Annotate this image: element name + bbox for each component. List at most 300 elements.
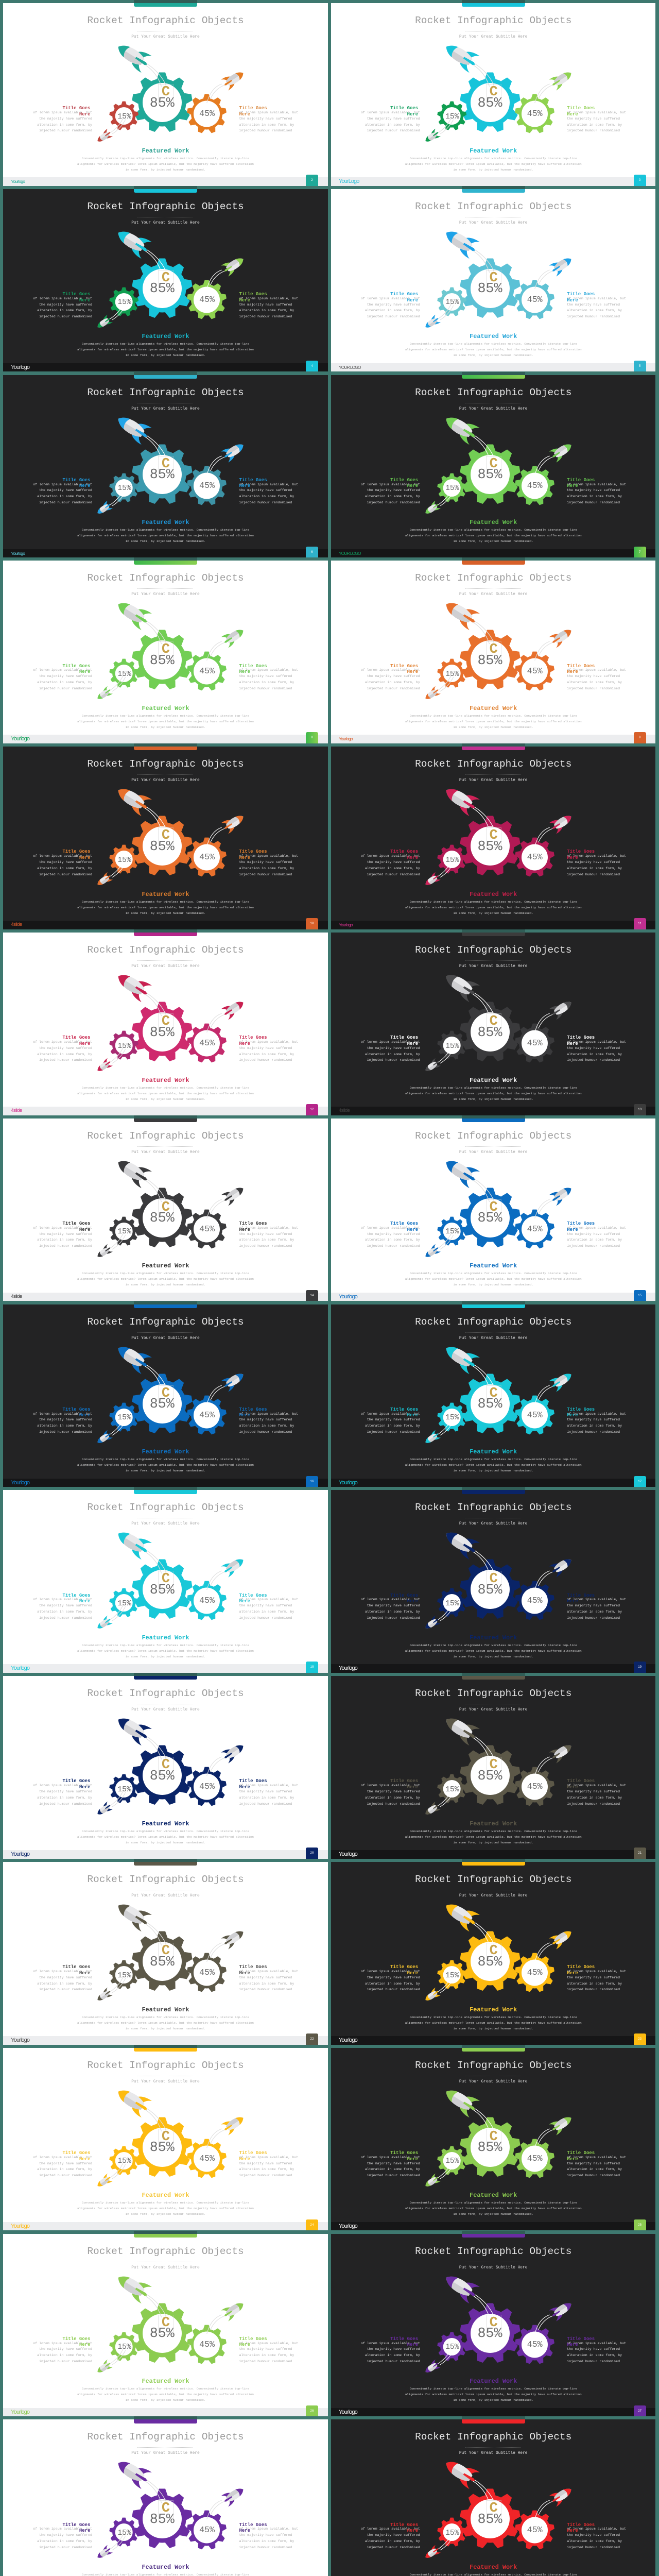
gears and rockets xyxy=(3,1304,328,1487)
left text: the majority have suffered xyxy=(367,488,420,492)
right title xyxy=(567,1035,595,1047)
value 45: 45% xyxy=(527,1596,543,1606)
left title xyxy=(55,1221,90,1233)
top tab xyxy=(462,189,525,193)
left text xyxy=(29,853,92,877)
left text: alteration in some form, by xyxy=(37,495,92,498)
right text: the majority have suffered xyxy=(567,674,620,678)
right title: Title Goes xyxy=(239,292,267,297)
left title: Here xyxy=(79,298,90,303)
small gear xyxy=(437,287,466,316)
title: Rocket Infographic Objects xyxy=(87,1874,244,1885)
right text: of lorem ipsum available, but xyxy=(567,111,626,114)
page number xyxy=(306,918,318,929)
subtitle: Put Your Great Subtitle Here xyxy=(131,778,200,783)
featured text: in some form, by injected humour randomised. xyxy=(453,725,533,729)
value 15: 15% xyxy=(117,484,131,493)
page number: 16 xyxy=(310,1480,314,1483)
right text xyxy=(567,1597,626,1621)
left text: of lorem ipsum available, but xyxy=(361,1598,420,1601)
left text: injected humour randomised xyxy=(367,315,420,318)
left text xyxy=(357,1597,420,1621)
left title: Title Goes xyxy=(62,1035,90,1040)
right text: of lorem ipsum available, but xyxy=(239,854,298,858)
featured text: alignments for wireless metrics? lorem ipsum available, but the majority have suffered alteration xyxy=(77,348,254,351)
left text: alteration in some form, by xyxy=(37,1238,92,1242)
left text xyxy=(29,1783,92,1807)
value 45: 45% xyxy=(199,1596,215,1606)
featured text xyxy=(405,342,582,357)
value 45: 45% xyxy=(199,667,215,676)
right text xyxy=(239,2526,298,2551)
page number: 23 xyxy=(638,2037,641,2041)
right title xyxy=(239,1035,267,1047)
left text: injected humour randomised xyxy=(367,1244,420,1248)
right text: the majority have suffered xyxy=(567,1418,620,1421)
right rocket xyxy=(535,811,575,846)
large rocket xyxy=(113,224,166,273)
slide 22 olive xyxy=(3,1862,328,2044)
left text: injected humour randomised xyxy=(39,2546,92,2549)
watermark xyxy=(486,1199,501,1219)
right text: injected humour randomised xyxy=(239,687,292,690)
right text: the majority have suffered xyxy=(239,2347,292,2351)
right text: of lorem ipsum available, but xyxy=(567,297,626,300)
gears and rockets xyxy=(425,45,571,142)
footer xyxy=(3,2036,328,2044)
small rocket xyxy=(95,861,126,888)
big gear xyxy=(132,73,193,133)
logo: 4slide xyxy=(11,1108,22,1113)
value 45: 45% xyxy=(199,2154,215,2164)
right text xyxy=(567,1969,626,1993)
page number xyxy=(634,918,646,929)
big gear xyxy=(460,1374,521,1434)
left text: the majority have suffered xyxy=(39,1046,92,1050)
logo: Yourlogo xyxy=(339,1665,357,1671)
left text: injected humour randomised xyxy=(367,2174,420,2177)
left text: alteration in some form, by xyxy=(365,1796,420,1800)
featured text xyxy=(3,2200,328,2217)
value 85: 85% xyxy=(477,2140,502,2156)
left text xyxy=(29,1969,92,1993)
watermark xyxy=(158,1571,174,1591)
top tab xyxy=(462,3,525,7)
page number xyxy=(306,2033,318,2044)
right text xyxy=(239,1783,298,1807)
right title xyxy=(567,1964,595,1976)
right title: Here xyxy=(567,1041,578,1046)
left title: Title Goes xyxy=(390,478,418,483)
left text: alteration in some form, by xyxy=(365,1424,420,1428)
page number xyxy=(306,361,318,371)
left text: the majority have suffered xyxy=(367,303,420,307)
footer xyxy=(331,2408,655,2416)
right gear xyxy=(515,280,554,319)
small rocket xyxy=(423,1233,454,1260)
featured text: Conveniently iterate top-line alignments for wireless metrics. Conveniently iterate top-line xyxy=(82,2387,249,2391)
watermark: C xyxy=(162,1943,170,1959)
value 85: 85% xyxy=(477,2326,502,2342)
right text: of lorem ipsum available, but xyxy=(239,668,298,672)
title: Rocket Infographic Objects xyxy=(415,201,571,212)
featured text: alignments for wireless metrics? lorem ipsum available, but the majority have suffered alteration xyxy=(77,720,254,723)
featured text: alignments for wireless metrics? lorem ipsum available, but the majority have suffered alteration xyxy=(77,1277,254,1281)
featured text xyxy=(3,1456,328,1473)
right text xyxy=(239,1225,298,1249)
featured text: Conveniently iterate top-line alignments for wireless metrics. Conveniently iterate top-line xyxy=(410,2201,577,2205)
footer xyxy=(3,1107,328,1115)
subtitle: Put Your Great Subtitle Here xyxy=(459,964,527,969)
featured heading: Featured Work xyxy=(470,2378,517,2385)
page number: 26 xyxy=(310,2409,314,2413)
logo: Yourlogo xyxy=(11,2223,29,2229)
right rocket xyxy=(207,1369,247,1404)
featured text: in some form, by injected humour randomised. xyxy=(126,2398,205,2402)
right text: injected humour randomised xyxy=(239,1430,292,1434)
featured text xyxy=(77,342,254,357)
featured text: Conveniently iterate top-line alignments for wireless metrics. Conveniently iterate top-line xyxy=(82,714,249,718)
logo: Yourlogo xyxy=(11,1480,29,1486)
value 45: 45% xyxy=(527,853,543,862)
big gear xyxy=(132,1560,193,1620)
left title: Here xyxy=(407,855,418,860)
subtitle: Put Your Great Subtitle Here xyxy=(131,2265,200,2270)
small gear xyxy=(437,1774,466,1804)
right text: alteration in some form, by xyxy=(567,495,622,498)
left title xyxy=(62,292,91,303)
left text: injected humour randomised xyxy=(367,1988,420,1991)
small gear xyxy=(437,101,466,130)
top tab xyxy=(134,933,197,936)
left text: of lorem ipsum available, but xyxy=(361,1040,420,1044)
big gear xyxy=(132,630,193,690)
value 85: 85% xyxy=(477,467,502,483)
featured heading: Featured Work xyxy=(142,2564,189,2571)
right text: alteration in some form, by xyxy=(239,1982,294,1986)
right title: Title Goes xyxy=(567,1778,595,1784)
page number: 17 xyxy=(638,1480,641,1483)
large rocket xyxy=(441,1897,494,1945)
value 15: 15% xyxy=(117,1971,131,1979)
left text: alteration in some form, by xyxy=(37,309,92,312)
left title xyxy=(55,1035,90,1047)
left text: of lorem ipsum available, but xyxy=(33,1412,92,1416)
value 85: 85% xyxy=(150,2512,175,2528)
big gear xyxy=(460,816,521,876)
right gear xyxy=(515,1024,554,1063)
right text: alteration in some form, by xyxy=(239,1610,294,1614)
right title: Here xyxy=(567,1599,578,1604)
small rocket xyxy=(95,1790,126,1818)
right text: of lorem ipsum available, but xyxy=(239,1970,298,1973)
value 45: 45% xyxy=(527,667,543,676)
right text: injected humour randomised xyxy=(239,1616,292,1620)
left text xyxy=(361,297,420,318)
right text: the majority have suffered xyxy=(567,2533,620,2537)
right title: Here xyxy=(567,1971,578,1976)
right title: Here xyxy=(239,1413,250,1418)
watermark: C xyxy=(490,2129,498,2145)
logo: Yourlogo xyxy=(339,2409,357,2415)
featured text: alignments for wireless metrics? lorem ipsum available, but the majority have suffered alteration xyxy=(77,1091,254,1095)
small rocket xyxy=(95,2348,126,2376)
right title: Title Goes xyxy=(239,1407,267,1412)
featured text: alignments for wireless metrics? lorem ipsum available, but the majority have suffered alteration xyxy=(405,1463,582,1467)
right rocket xyxy=(207,1554,247,1590)
big gear xyxy=(132,1374,193,1434)
gears and rockets xyxy=(331,1490,655,1673)
right text xyxy=(567,2526,626,2551)
page number: 27 xyxy=(638,2409,641,2413)
right text: the majority have suffered xyxy=(239,1232,292,1236)
value 15: 15% xyxy=(445,298,459,307)
left text: of lorem ipsum available, but xyxy=(361,1784,420,1787)
small rocket xyxy=(423,2162,454,2190)
value 45: 45% xyxy=(199,1411,215,1420)
value 45: 45% xyxy=(199,2526,215,2535)
top tab xyxy=(462,747,525,750)
right title: Title Goes xyxy=(239,478,267,483)
watermark xyxy=(486,2129,501,2149)
right rocket xyxy=(207,1740,247,1776)
featured heading: Featured Work xyxy=(470,1077,517,1084)
top tab xyxy=(462,2048,525,2052)
left text: of lorem ipsum available, but xyxy=(33,1226,92,1230)
left text: injected humour randomised xyxy=(367,1058,420,1062)
gears and rockets xyxy=(331,1304,655,1487)
featured text: Conveniently iterate top-line alignments for wireless metrics. Conveniently iterate top-line xyxy=(82,342,249,346)
right text: the majority have suffered xyxy=(567,488,620,492)
subtitle: Put Your Great Subtitle Here xyxy=(131,1893,200,1898)
featured text: alignments for wireless metrics? lorem ipsum available, but the majority have suffered alteration xyxy=(77,1463,254,1467)
small rocket xyxy=(423,1419,454,1446)
left text: alteration in some form, by xyxy=(365,123,420,127)
slide 2 teal xyxy=(3,3,328,185)
watermark: C xyxy=(490,2315,498,2331)
right text: alteration in some form, by xyxy=(239,867,294,870)
title: Rocket Infographic Objects xyxy=(415,1130,571,1142)
right title xyxy=(239,106,267,117)
right text: the majority have suffered xyxy=(239,674,292,678)
watermark: C xyxy=(490,1571,498,1587)
large rocket xyxy=(441,1711,494,1759)
left text: the majority have suffered xyxy=(367,674,420,678)
gears and rockets xyxy=(331,1676,655,1859)
right title: Title Goes xyxy=(239,664,267,669)
big gear xyxy=(132,1745,193,1806)
subtitle: Put Your Great Subtitle Here xyxy=(131,1521,200,1526)
watermark xyxy=(158,1943,174,1963)
featured text: Conveniently iterate top-line alignments for wireless metrics. Conveniently iterate top-line xyxy=(410,1086,577,1089)
watermark: C xyxy=(490,828,498,843)
title: Rocket Infographic Objects xyxy=(87,15,244,26)
small rocket xyxy=(423,1790,454,1818)
right title: Title Goes xyxy=(567,1964,595,1970)
left text: injected humour randomised xyxy=(39,1802,92,1806)
title: Rocket Infographic Objects xyxy=(415,15,571,26)
featured heading: Featured Work xyxy=(142,2192,189,2199)
watermark: C xyxy=(490,1943,498,1959)
small rocket xyxy=(95,1976,126,2004)
title: Rocket Infographic Objects xyxy=(415,1502,571,1513)
right title: Here xyxy=(239,2528,250,2533)
watermark xyxy=(486,2315,501,2335)
value 85: 85% xyxy=(477,1769,502,1784)
right gear xyxy=(515,1209,554,1249)
right text: of lorem ipsum available, but xyxy=(239,2342,298,2345)
featured text xyxy=(3,1828,328,1845)
value 85: 85% xyxy=(150,1211,175,1226)
large rocket xyxy=(113,1711,166,1759)
featured text xyxy=(331,2014,655,2031)
footer xyxy=(3,1664,328,1673)
watermark xyxy=(158,1385,174,1405)
title: Rocket Infographic Objects xyxy=(87,1316,244,1328)
large rocket xyxy=(441,410,494,459)
top tab xyxy=(462,1490,525,1494)
featured heading: Featured Work xyxy=(470,705,517,712)
left title: Title Goes xyxy=(390,2522,418,2528)
featured text: in some form, by injected humour randomised. xyxy=(453,2027,533,2030)
right text: alteration in some form, by xyxy=(239,681,294,684)
left title: Here xyxy=(407,112,418,117)
subtitle: Put Your Great Subtitle Here xyxy=(459,2079,527,2084)
right text: of lorem ipsum available, but xyxy=(567,1970,626,1973)
right title xyxy=(567,292,595,303)
right text: injected humour randomised xyxy=(567,687,620,690)
top tab xyxy=(134,2234,197,2238)
right title: Here xyxy=(567,1227,578,1232)
logo: YOUR LOGO xyxy=(339,551,360,556)
gears and rockets xyxy=(3,933,328,1115)
value 45: 45% xyxy=(199,1039,215,1048)
left text xyxy=(29,1039,92,1063)
large rocket xyxy=(113,782,166,830)
page number: 14 xyxy=(310,1294,314,1297)
small rocket xyxy=(95,1233,126,1260)
right text: alteration in some form, by xyxy=(567,681,622,684)
watermark xyxy=(486,456,501,476)
right text: alteration in some form, by xyxy=(567,123,622,127)
left title: Here xyxy=(79,855,90,860)
right text: injected humour randomised xyxy=(567,1244,620,1248)
left text: alteration in some form, by xyxy=(365,495,420,498)
left title: Title Goes xyxy=(390,292,418,297)
featured text xyxy=(331,713,655,730)
subtitle: Put Your Great Subtitle Here xyxy=(131,592,200,597)
subtitle: Put Your Great Subtitle Here xyxy=(131,1336,200,1341)
right title: Title Goes xyxy=(239,1964,267,1970)
right gear xyxy=(187,1581,227,1621)
large rocket xyxy=(113,2083,166,2131)
right text: of lorem ipsum available, but xyxy=(239,1598,298,1601)
left text: injected humour randomised xyxy=(39,2360,92,2363)
right text: alteration in some form, by xyxy=(567,1424,622,1428)
right text: alteration in some form, by xyxy=(567,2167,622,2171)
featured text: in some form, by injected humour randomised. xyxy=(453,1469,533,1472)
title: Rocket Infographic Objects xyxy=(415,2060,571,2071)
right text: alteration in some form, by xyxy=(239,1424,294,1428)
logo: Yourlogo xyxy=(11,1665,29,1671)
right text: of lorem ipsum available, but xyxy=(239,1784,298,1787)
featured text xyxy=(3,2386,328,2403)
page number: 13 xyxy=(638,1108,641,1111)
subtitle: Put Your Great Subtitle Here xyxy=(459,1707,527,1712)
left title: Title Goes xyxy=(390,1964,418,1970)
left text: alteration in some form, by xyxy=(37,1982,92,1986)
right text: alteration in some form, by xyxy=(567,309,622,312)
value 85: 85% xyxy=(150,2326,175,2342)
subtitle: Put Your Great Subtitle Here xyxy=(131,1707,200,1712)
right text: the majority have suffered xyxy=(567,2162,620,2165)
page number: 3 xyxy=(639,178,640,182)
right gear xyxy=(187,838,227,877)
slide 3 cyan xyxy=(331,3,655,185)
right text: of lorem ipsum available, but xyxy=(567,2527,626,2531)
right text xyxy=(239,111,298,132)
title: Rocket Infographic Objects xyxy=(415,1316,571,1328)
slide 11 crimson dark xyxy=(331,747,655,929)
slide 9 orange xyxy=(331,561,655,743)
right text: alteration in some form, by xyxy=(567,1238,622,1242)
page number xyxy=(306,1476,318,1487)
subtitle: Put Your Great Subtitle Here xyxy=(459,592,527,597)
right title: Here xyxy=(239,483,250,488)
small gear xyxy=(437,2146,466,2175)
value 15: 15% xyxy=(445,1042,459,1050)
left text xyxy=(29,1597,92,1621)
watermark: C xyxy=(162,456,170,472)
large rocket xyxy=(113,2269,166,2317)
title: Rocket Infographic Objects xyxy=(87,2060,244,2071)
right text: of lorem ipsum available, but xyxy=(567,2156,626,2159)
value 15: 15% xyxy=(445,484,459,493)
large rocket xyxy=(113,38,166,87)
left text: of lorem ipsum available, but xyxy=(361,854,420,858)
top tab xyxy=(134,2419,197,2424)
left text xyxy=(29,2155,92,2179)
gears and rockets xyxy=(331,747,655,929)
big gear xyxy=(460,1188,521,1248)
left text: injected humour randomised xyxy=(39,501,92,504)
right text: injected humour randomised xyxy=(567,315,620,318)
left text: the majority have suffered xyxy=(367,1232,420,1236)
top tab xyxy=(134,561,197,565)
page number xyxy=(306,1104,318,1115)
subtitle: Put Your Great Subtitle Here xyxy=(459,778,527,783)
right gear xyxy=(515,1395,554,1435)
right gear xyxy=(515,2511,554,2550)
value 45: 45% xyxy=(527,2154,543,2164)
left title: Here xyxy=(79,1227,90,1232)
logo: Yourlogo xyxy=(11,551,25,556)
right text: injected humour randomised xyxy=(567,501,620,504)
right gear xyxy=(187,2325,227,2364)
right text xyxy=(239,1039,298,1063)
value 15: 15% xyxy=(117,2157,131,2165)
big gear xyxy=(132,2489,193,2549)
right text: alteration in some form, by xyxy=(567,1053,622,1056)
right gear xyxy=(515,2139,554,2178)
left title: Title Goes xyxy=(390,849,418,854)
page number xyxy=(634,1662,646,1673)
featured text: alignments for wireless metrics? lorem ipsum available, but the majority have suffered alteration xyxy=(77,162,254,166)
right text: alteration in some form, by xyxy=(239,1238,294,1242)
gears and rockets xyxy=(3,1862,328,2044)
right text: the majority have suffered xyxy=(239,2533,292,2537)
left text: injected humour randomised xyxy=(39,1058,92,1062)
